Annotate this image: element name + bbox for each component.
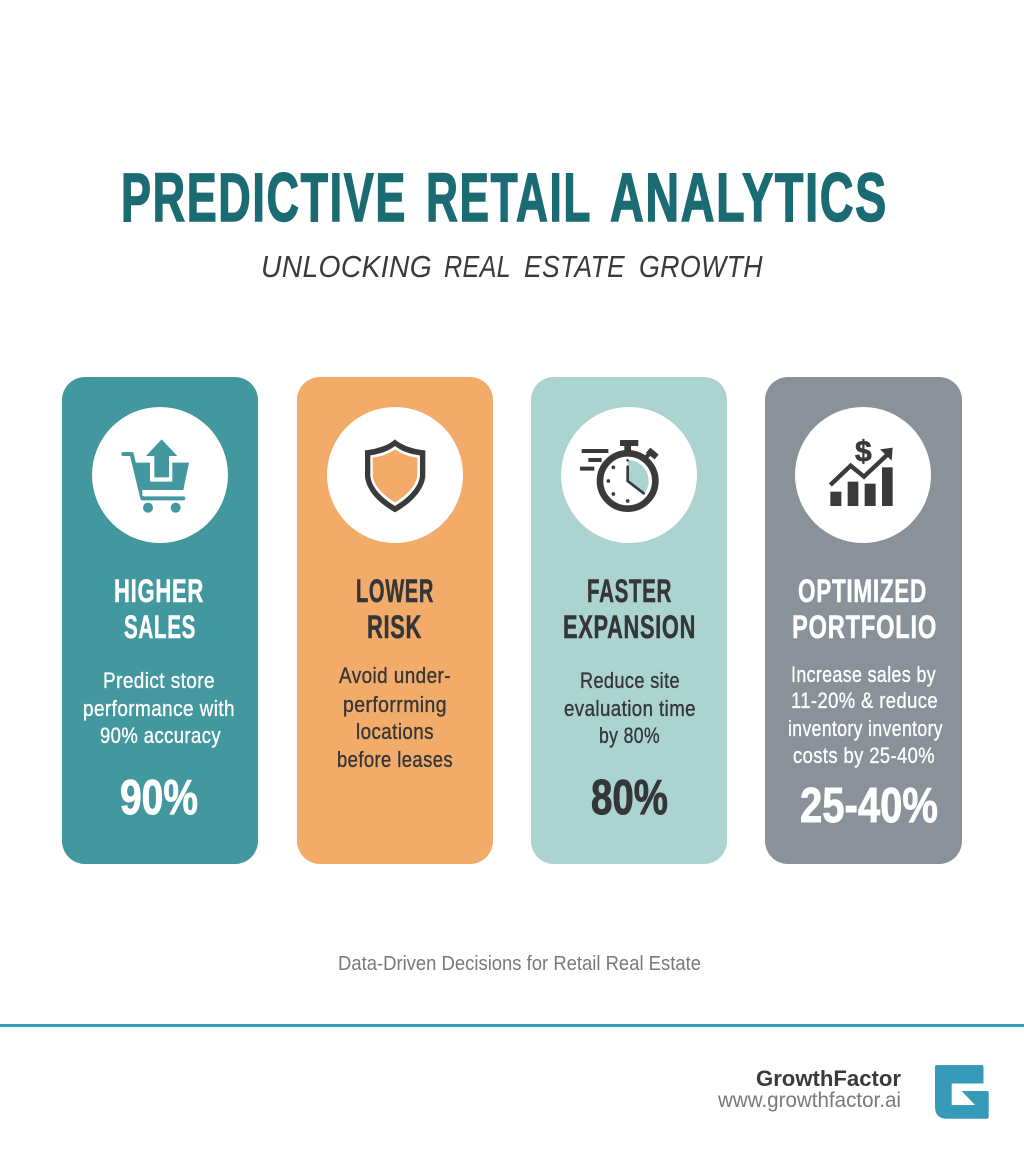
text: lower risk description: locations [356,719,434,744]
heading: higher sales: HIGHER [114,573,204,609]
text: lower risk description: before leases [337,747,453,772]
subtitle: ESTATE [524,249,625,284]
text: lower risk description [337,663,453,772]
tagline: Data-Driven Decisions for Retail Real Estate [338,953,701,975]
panel: optimized portfolio [765,377,962,864]
heading: higher sales: SALES [124,609,196,645]
title: RETAIL [426,159,592,236]
heading: lower risk [356,573,434,645]
heading: optimized portfolio: OPTIMIZED [798,573,927,609]
panel: higher sales [62,377,258,864]
heading: higher sales [114,573,204,645]
heading: faster expansion [563,573,696,645]
text: optimized portfolio description: inventory inventory [788,716,943,741]
text: faster expansion description: Reduce site [580,668,680,693]
icon: growth chart with dollar: $ [855,435,872,468]
brand name: GrowthFactor [756,1066,901,1091]
text: faster expansion description [564,668,696,748]
subtitle: REAL [444,249,511,284]
panel: faster expansion [531,377,727,864]
text: higher sales description: Predict store [103,668,215,693]
stat: 90%: 90% [120,771,198,825]
text: lower risk description: perforrming [343,692,447,717]
heading: optimized portfolio [792,573,937,645]
heading: optimized portfolio: PORTFOLIO [792,609,937,645]
icon: stopwatch [561,407,697,543]
stat: 80%: 80% [591,771,668,825]
text: optimized portfolio description: Increase sales by [791,662,936,687]
text: optimized portfolio description: costs by 25-40% [793,743,935,768]
icon: shopping cart with up arrow [92,407,228,543]
heading: faster expansion: EXPANSION [563,609,696,645]
title: PREDICTIVE [121,159,407,236]
heading: faster expansion: FASTER [587,573,672,609]
text: optimized portfolio description: 11-20% & reduce [791,688,938,713]
panel: lower risk [297,377,493,864]
text: higher sales description: performance with [83,696,235,721]
subtitle: UNLOCKING [261,249,432,284]
text: optimized portfolio description [788,662,943,768]
title [121,159,888,236]
subtitle: GROWTH [639,249,763,284]
text: faster expansion description: by 80% [599,723,660,748]
text: lower risk description: Avoid under- [339,663,451,688]
text: higher sales description [83,668,235,748]
stat: 25-40%: 25-40% [800,779,938,833]
icon: GrowthFactor logo [935,1065,989,1119]
icon: shield [327,407,463,543]
text: higher sales description: 90% accuracy [100,723,221,748]
title: ANALYTICS [610,159,888,236]
subtitle [261,249,763,284]
brand url: www.growthfactor.ai [717,1089,901,1112]
text: faster expansion description: evaluation time [564,696,696,721]
heading: lower risk: RISK [367,609,422,645]
icon: growth chart with dollar [795,407,931,543]
heading: lower risk: LOWER [356,573,434,609]
